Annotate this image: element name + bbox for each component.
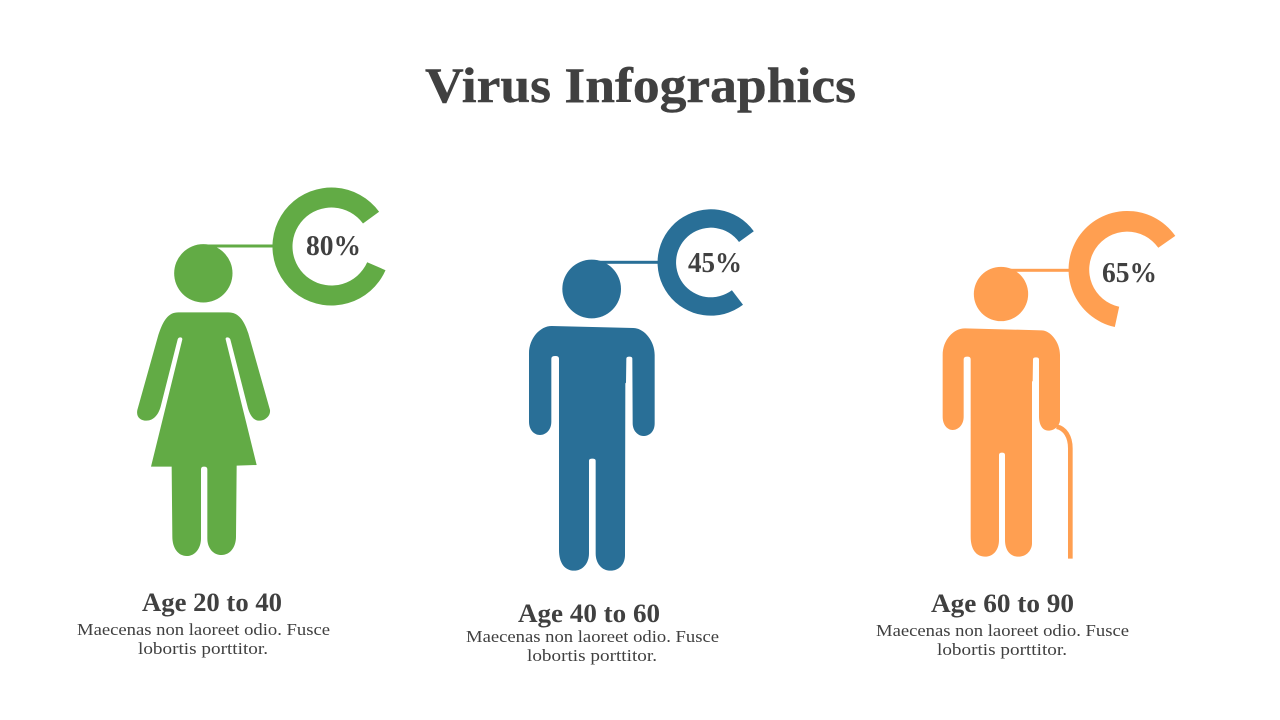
connector line <box>592 261 662 264</box>
donut gauge 80% <box>272 188 386 306</box>
heading: age 20 to 40: Age 20 to 40 <box>142 588 282 617</box>
percentage 45%: 45% <box>688 248 742 279</box>
description <box>876 621 1129 659</box>
description <box>466 627 719 665</box>
icon: blue man figure <box>529 260 655 571</box>
description <box>77 620 330 658</box>
panel: age 60 to 90 <box>876 211 1175 659</box>
percentage 65%: 65% <box>1102 258 1157 289</box>
donut gauge 65% <box>1069 211 1175 327</box>
panel: age 20 to 40 <box>77 188 386 658</box>
icon: orange elderly figure with cane <box>943 267 1070 559</box>
heading: age 40 to 60: Age 40 to 60 <box>518 599 660 628</box>
icon: green woman figure <box>137 244 270 556</box>
description: lobortis porttitor. <box>937 640 1067 659</box>
description: lobortis porttitor. <box>138 639 268 658</box>
percentage 80%: 80% <box>306 231 361 262</box>
description: Maecenas non laoreet odio. Fusce <box>77 620 330 639</box>
heading: age 60 to 90: Age 60 to 90 <box>931 589 1074 618</box>
description: Maecenas non laoreet odio. Fusce <box>876 621 1129 640</box>
panel: age 40 to 60 <box>466 209 754 665</box>
title: Virus Infographics <box>425 57 856 113</box>
donut gauge 45% <box>658 209 754 316</box>
connector line <box>204 244 276 248</box>
connector line <box>1001 269 1071 272</box>
description: lobortis porttitor. <box>527 646 657 665</box>
description: Maecenas non laoreet odio. Fusce <box>466 627 719 646</box>
